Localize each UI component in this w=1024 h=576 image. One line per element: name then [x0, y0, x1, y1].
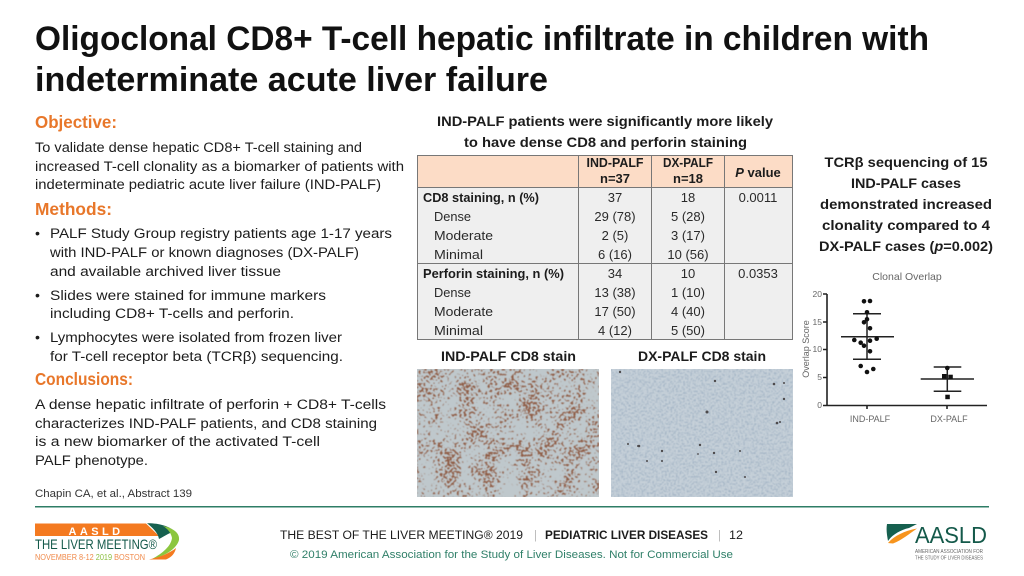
row group: CD8 staining: Minimal	[434, 247, 483, 262]
y axis tick labels: 15	[813, 317, 822, 327]
chart title: Clonal Overlap	[872, 271, 942, 283]
y axis tick labels: 20	[813, 289, 822, 299]
methods bullet 2: Slides were stained for immune markers	[50, 288, 326, 304]
title	[35, 20, 929, 99]
table body background	[418, 188, 792, 340]
row group: CD8 staining: 37	[608, 190, 622, 205]
logo meeting name: THE LIVER MEETING®	[35, 536, 158, 552]
row group: CD8 staining: 10 (56)	[667, 247, 709, 262]
footer: meeting line: 12	[729, 530, 743, 542]
row group: CD8 staining: 5 (28)	[671, 209, 705, 224]
row group: CD8 staining: 2 (5)	[602, 228, 628, 243]
methods bullet 3: •	[35, 330, 40, 346]
row group: perforin staining: 4 (12)	[598, 323, 632, 338]
footer: meeting line: |	[534, 530, 537, 542]
micrograph: DX-PALF CD8 stain	[611, 369, 793, 497]
micrograph: IND-PALF CD8 stain	[417, 369, 599, 497]
row group: perforin staining: 0.0353	[738, 266, 778, 281]
row group: perforin staining: 4 (40)	[671, 304, 705, 319]
table heading: to have dense CD8 and perforin staining	[464, 134, 747, 150]
y axis tick labels	[813, 289, 822, 410]
row group: perforin staining: 17 (50)	[594, 304, 636, 319]
text block: TCR sequencing summary: IND-PALF cases	[851, 175, 961, 191]
logo subtitle	[915, 549, 983, 562]
series: IND-PALF	[841, 299, 894, 374]
row group: perforin staining: 1 (10)	[671, 285, 705, 300]
heading: methods: Methods:	[35, 199, 112, 219]
table header row: n=18	[673, 171, 703, 186]
title: Oligoclonal CD8+ T-cell hepatic infiltrate in children with	[35, 20, 929, 58]
methods bullet 3: Lymphocytes were isolated from frozen liver	[50, 330, 342, 346]
row group: CD8 staining: Moderate	[434, 228, 493, 243]
x axis labels: DX-PALF	[930, 414, 968, 424]
table header row	[418, 155, 792, 188]
text block: TCR sequencing summary: demonstrated increased	[820, 196, 992, 212]
x axis labels	[850, 414, 968, 424]
citation: Chapin CA, et al., Abstract 139	[35, 488, 192, 500]
logo mark	[887, 524, 917, 544]
title: indeterminate acute liver failure	[35, 61, 548, 99]
row group: CD8 staining: 3 (17)	[671, 228, 705, 243]
row group: CD8 staining: 6 (16)	[598, 247, 632, 262]
logo swoosh	[147, 523, 179, 560]
row group: perforin staining: Moderate	[434, 304, 493, 319]
caption: DX-PALF stain: DX-PALF CD8 stain	[638, 348, 766, 364]
table header row: DX-PALF	[663, 155, 713, 170]
y axis tick labels: 5	[817, 372, 822, 382]
series: DX-PALF	[921, 366, 974, 399]
text block: TCR sequencing summary: DX-PALF cases ( p=0.002)	[819, 238, 993, 254]
conclusions text: PALF phenotype.	[35, 453, 148, 469]
table header row: P value	[735, 165, 781, 180]
row group: CD8 staining: Dense	[434, 209, 471, 224]
row group: CD8 staining: 29 (78)	[594, 209, 636, 224]
conclusions text: is a new biomarker of the activated T-cell	[35, 434, 320, 450]
y axis label: Overlap Score	[801, 320, 811, 378]
objective text	[35, 140, 404, 193]
logo: The Liver Meeting	[35, 523, 179, 562]
table heading: IND-PALF patients were significantly more likely	[437, 113, 773, 129]
methods bullet 3: for T-cell receptor beta (TCRβ) sequencing.	[50, 349, 343, 365]
conclusions text: A dense hepatic infiltrate of perforin + CD8+ T-cells	[35, 397, 386, 413]
row group: perforin staining: 13 (38)	[594, 285, 636, 300]
row group: perforin staining	[423, 266, 778, 338]
methods bullet 2: •	[35, 288, 40, 304]
footer: meeting line	[280, 530, 743, 542]
logo wordmark: AASLD	[915, 522, 987, 548]
y axis tick labels: 10	[813, 344, 822, 354]
conclusions text	[35, 397, 386, 469]
text block: objective	[35, 112, 404, 193]
chart: clonal overlap scatter plot	[801, 271, 987, 424]
text block: TCR sequencing summary: TCRβ sequencing of 15	[824, 154, 988, 170]
table header row: IND-PALF	[586, 155, 644, 170]
footer: meeting line: PEDIATRIC LIVER DISEASES	[545, 530, 708, 542]
row group: CD8 staining	[423, 190, 777, 262]
text block: methods	[35, 199, 392, 365]
logo orange banner	[35, 524, 159, 536]
row group: CD8 staining: 18	[681, 190, 695, 205]
objective text: To validate dense hepatic CD8+ T-cell staining and	[35, 140, 362, 156]
footer rule	[35, 506, 989, 508]
methods bullet 1: with IND-PALF or known diagnoses (DX-PALF)	[49, 245, 359, 261]
caption: IND-PALF stain: IND-PALF CD8 stain	[441, 348, 576, 364]
row group: perforin staining: 34	[608, 266, 622, 281]
footer: copyright: © 2019 American Association for the Study of Liver Diseases. Not for Commercial Use	[290, 549, 733, 561]
table grid	[418, 156, 792, 340]
methods bullet 1: •	[35, 226, 40, 242]
footer: meeting line: THE BEST OF THE LIVER MEETING® 2019	[280, 530, 523, 542]
logo subtitle: AMERICAN ASSOCIATION FOR	[915, 549, 983, 555]
axes	[823, 294, 987, 409]
x axis labels: IND-PALF	[850, 414, 891, 424]
logo AASLD letters: AASLD	[69, 526, 123, 538]
methods bullet 1: PALF Study Group registry patients age 1-17 years	[50, 226, 392, 242]
row group: CD8 staining: CD8 staining, n (%)	[423, 190, 539, 205]
methods bullet 2: including CD8+ T-cells and perforin.	[50, 306, 294, 322]
methods bullet 1	[35, 226, 392, 280]
row group: perforin staining: Dense	[434, 285, 471, 300]
methods bullet 2	[35, 288, 326, 322]
heading: conclusions: Conclusions:	[35, 369, 133, 389]
objective text: increased T-cell clonality as a biomarker of patients with	[35, 159, 404, 175]
footer: meeting line: |	[718, 530, 721, 542]
text block: TCR sequencing summary	[819, 154, 993, 254]
objective text: indeterminate pediatric acute liver failure (IND-PALF)	[35, 177, 381, 193]
logo: AASLD	[887, 522, 987, 562]
heading: objective: Objective:	[35, 112, 117, 132]
methods bullet 3	[35, 330, 343, 365]
logo date: NOVEMBER 8-12 2019 BOSTON	[35, 553, 145, 562]
row group: perforin staining: 5 (50)	[671, 323, 705, 338]
text block: conclusions	[35, 369, 386, 469]
methods bullet 1: and available archived liver tissue	[50, 264, 281, 280]
row group: perforin staining: Perforin staining, n (%)	[423, 266, 564, 281]
logo subtitle: THE STUDY OF LIVER DISEASES	[915, 556, 983, 562]
table: staining results	[418, 155, 792, 340]
table heading	[437, 113, 773, 150]
table header row: n=37	[600, 171, 630, 186]
y axis tick labels: 0	[817, 400, 822, 410]
row group: CD8 staining: 0.0011	[739, 190, 777, 205]
conclusions text: characterizes IND-PALF patients, and CD8 staining	[35, 416, 377, 432]
row group: perforin staining: Minimal	[434, 323, 483, 338]
row group: perforin staining: 10	[681, 266, 695, 281]
text block: TCR sequencing summary: clonality compared to 4	[822, 217, 990, 233]
